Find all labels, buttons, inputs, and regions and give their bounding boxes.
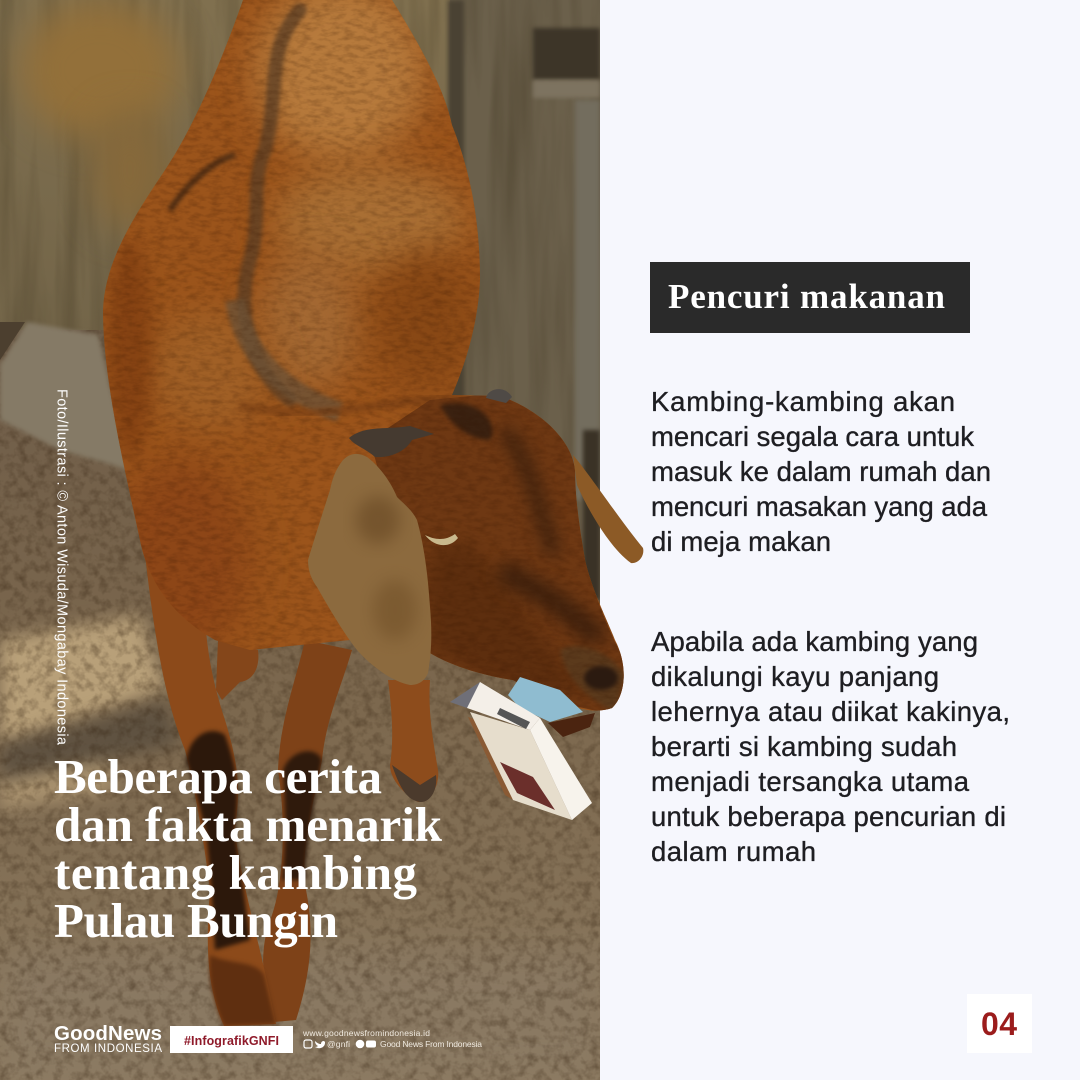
- footer logo: [54, 1022, 162, 1055]
- headline: Beberapa cerita: [54, 749, 382, 804]
- headline: Pulau Bungin: [54, 893, 338, 948]
- text block: paragraph 2: lehernya atau diikat kakinya,: [651, 696, 1010, 727]
- text block: paragraph 1: mencuri masakan yang ada: [651, 491, 988, 522]
- icon: instagram: [304, 1040, 312, 1048]
- footer logo: GoodNews: [54, 1022, 162, 1045]
- social links: Good News From Indonesia: [380, 1039, 482, 1049]
- heading: Pencuri makanan: [668, 277, 945, 316]
- goat big ear: [308, 454, 431, 685]
- panel: text: [650, 262, 1032, 1053]
- text block: paragraph 2: dalam rumah: [651, 836, 816, 867]
- text block: paragraph 2: untuk beberapa pencurian di: [651, 801, 1006, 832]
- goat top horn: [486, 389, 512, 403]
- text block: paragraph 2: berarti si kambing sudah: [651, 731, 957, 762]
- text block: paragraph 2: dikalungi kayu panjang: [651, 661, 939, 692]
- hashtag badge: [170, 1026, 293, 1053]
- icon: facebook: [356, 1040, 364, 1048]
- page number: 04: [981, 1006, 1017, 1042]
- photo: goat eating a cigarette pack: [0, 0, 643, 1080]
- headline: dan fakta menarik: [54, 797, 443, 852]
- goat lower lip: [548, 713, 595, 737]
- text block: paragraph 1: di meja makan: [651, 526, 831, 557]
- photo credit: Foto/Ilustrasi : © Anton Wisuda/Mongabay Indonesia: [54, 389, 70, 746]
- icon: youtube: [366, 1040, 376, 1048]
- goat eye: [425, 534, 458, 545]
- text block: paragraph 2: Apabila ada kambing yang: [651, 626, 978, 657]
- headline: [54, 749, 443, 948]
- ground: [0, 330, 600, 1080]
- wall background: [0, 0, 600, 600]
- headline: tentang kambing: [54, 845, 418, 900]
- goat right ear: [573, 455, 643, 563]
- social links: [302, 1028, 482, 1049]
- cigarette paper: [508, 677, 583, 722]
- hashtag badge: #InfografikGNFI: [184, 1034, 279, 1048]
- text block: paragraph 1: [651, 386, 991, 557]
- text block: paragraph 2: menjadi tersangka utama: [651, 766, 970, 797]
- goat head shading: [370, 392, 630, 715]
- social links: @gnfi: [327, 1039, 350, 1049]
- goat front legs: [145, 555, 352, 1026]
- heading: [650, 262, 970, 333]
- goat small horn: [349, 426, 434, 457]
- text block: paragraph 1: mencari segala cara untuk: [651, 421, 974, 452]
- goat nostril: [584, 666, 618, 690]
- text block: paragraph 2: [651, 626, 1010, 867]
- cigarette pack: [450, 682, 592, 820]
- footer logo: FROM INDONESIA: [54, 1043, 162, 1055]
- goat body and head: [90, 0, 640, 720]
- icon: twitter: [315, 1041, 325, 1048]
- goat rear legs: [216, 640, 438, 802]
- text block: paragraph 1: Kambing-kambing akan: [651, 386, 955, 417]
- page number: [967, 994, 1032, 1053]
- text block: paragraph 1: masuk ke dalam rumah dan: [651, 456, 991, 487]
- social links: www.goodnewsfromindonesia.id: [302, 1028, 430, 1038]
- stone block: [0, 322, 130, 470]
